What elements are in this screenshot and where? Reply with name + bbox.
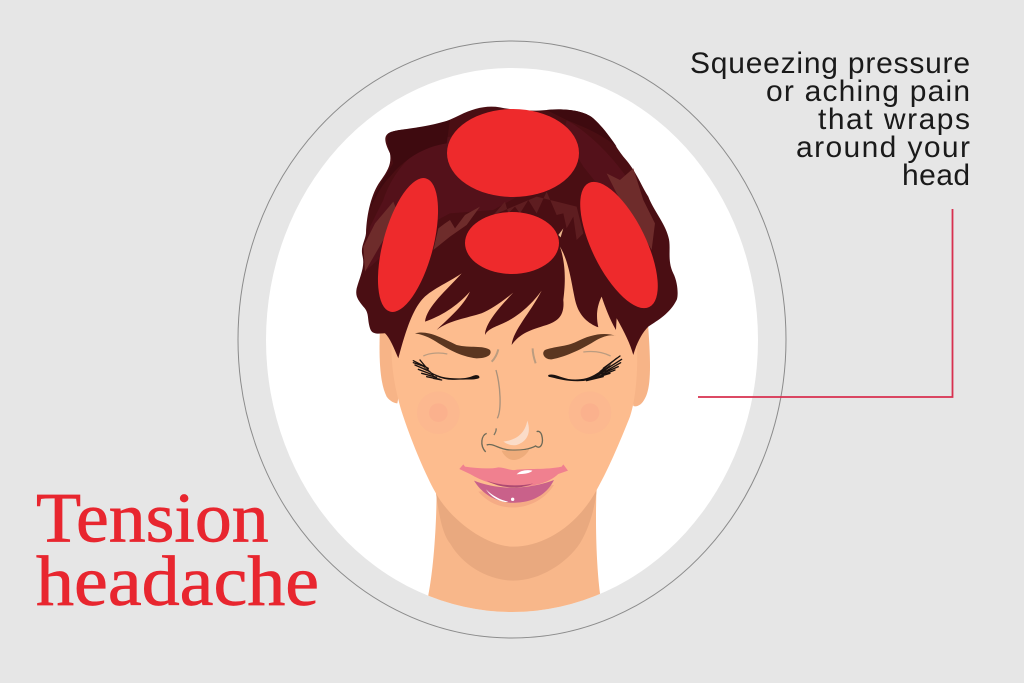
face shape xyxy=(391,220,637,547)
illustration: woman's face with tension headache xyxy=(356,107,678,614)
callout text: that wraps xyxy=(818,103,970,136)
pain zone: crown of head xyxy=(447,109,579,197)
nose xyxy=(482,370,542,460)
pain zone: right side of head xyxy=(564,171,674,319)
ears xyxy=(380,320,650,406)
title xyxy=(36,478,319,620)
callout text: head xyxy=(902,159,970,192)
hair mid tones xyxy=(367,137,523,270)
neck xyxy=(428,490,600,612)
face, ears and features xyxy=(380,220,650,547)
white oval panel xyxy=(266,68,758,612)
hair xyxy=(356,107,678,358)
callout text: around your xyxy=(796,131,970,164)
hair highlights xyxy=(363,168,655,272)
pain zone: forehead xyxy=(465,212,559,274)
left closed eye xyxy=(413,360,479,380)
connector line from face to callout xyxy=(698,209,952,397)
callout text: Squeezing pressure xyxy=(690,47,970,80)
eyelid creases and frown lines xyxy=(423,348,611,363)
callout text: or aching pain xyxy=(766,75,970,108)
title: Tension xyxy=(36,478,269,557)
thin outer ellipse xyxy=(238,41,786,638)
hair dark tones xyxy=(370,120,450,210)
pain zone: left side of head xyxy=(366,172,450,318)
lips xyxy=(459,464,568,507)
right closed eye xyxy=(548,356,622,381)
cheeks xyxy=(417,391,611,434)
callout text xyxy=(690,47,970,192)
eyebrows xyxy=(415,332,617,359)
title: headache xyxy=(36,541,319,620)
